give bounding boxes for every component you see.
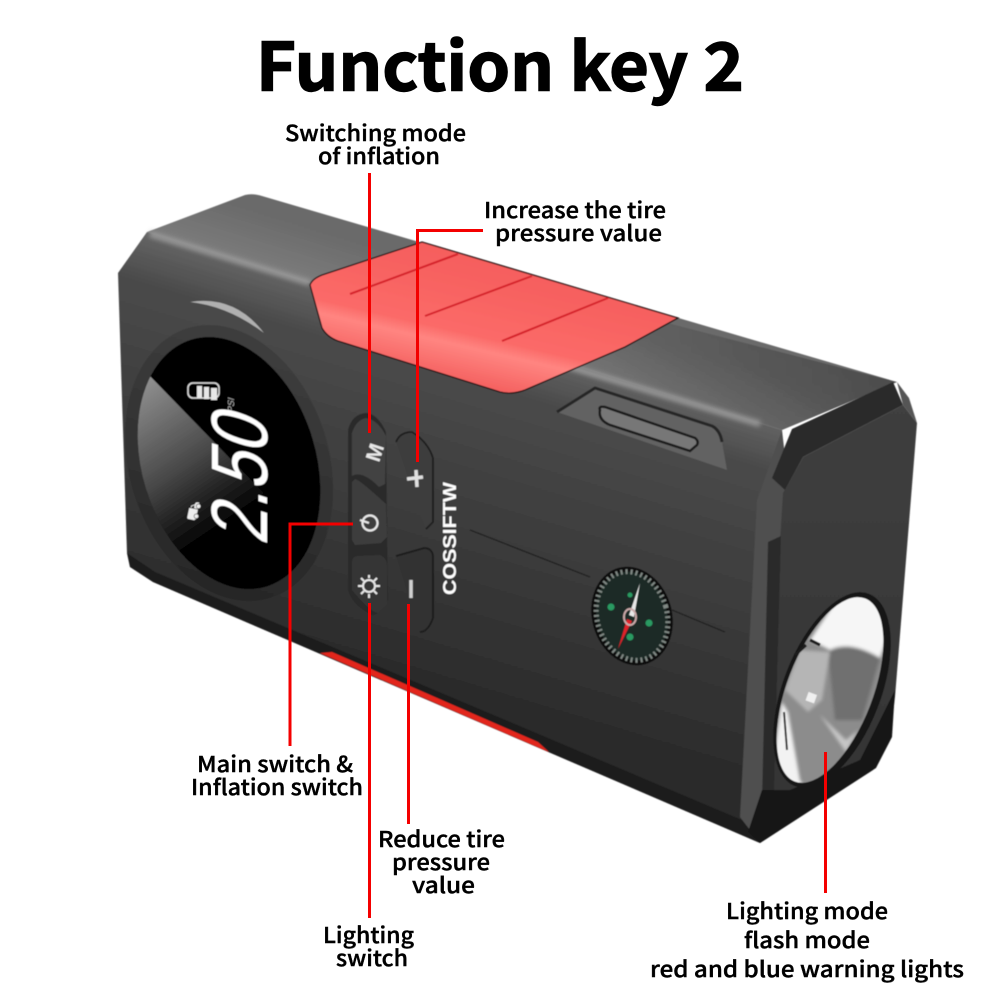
line: increase pressure xyxy=(418,230,483,462)
label: lighting mode, flash mode, warning lights: Lighting mode xyxy=(726,894,888,926)
label: lighting mode, flash mode, warning lights: flash mode xyxy=(744,923,870,955)
label: main switch and inflation switch: Inflation switch xyxy=(191,770,363,802)
minus sign xyxy=(409,580,413,598)
label: increase the tire pressure value: pressure value xyxy=(495,216,662,248)
device body side face xyxy=(118,232,785,843)
bezel groove xyxy=(762,536,781,800)
battery indicator xyxy=(188,383,219,400)
unit label: PSI xyxy=(226,396,236,414)
lens gray dome xyxy=(828,647,880,720)
pressure reading: 2.50 xyxy=(196,396,285,552)
label: reduce tire pressure value: Reduce tire xyxy=(378,822,505,854)
curved emboss near display xyxy=(190,301,264,333)
highlight along the top ridge xyxy=(150,234,760,424)
line: lighting mode xyxy=(824,752,827,893)
charging port recess xyxy=(557,388,727,470)
body seam lines xyxy=(470,530,725,632)
red lower strip xyxy=(320,652,549,752)
light button xyxy=(352,555,387,613)
label: lighting switch: Lighting xyxy=(323,918,414,950)
compass xyxy=(580,557,684,675)
front bezel xyxy=(740,430,790,843)
device: portable tire inflator xyxy=(92,194,917,843)
device top face xyxy=(147,194,897,430)
label: lighting mode, flash mode, warning lights: red and blue warning lights xyxy=(650,952,964,984)
label: reduce tire pressure value: pressure xyxy=(392,845,490,877)
plus sign xyxy=(407,470,423,487)
brand logo: COSSIFTW xyxy=(440,482,460,595)
lower front dark shell xyxy=(748,690,895,843)
label: increase the tire pressure value: Increase the tire xyxy=(484,193,666,225)
line: switching mode xyxy=(368,173,371,433)
plus button xyxy=(396,432,433,529)
line: main switch xyxy=(290,524,353,746)
minus button xyxy=(396,548,433,632)
bottom dark edge xyxy=(127,553,760,843)
label: switching mode of inflation: of inflation xyxy=(318,139,440,171)
lens white left edge xyxy=(776,702,804,784)
front face xyxy=(760,405,917,843)
flashlight lens xyxy=(774,592,891,787)
button group left xyxy=(348,413,389,615)
compass needle xyxy=(629,583,640,617)
red top panel xyxy=(310,242,678,393)
lens white upper crescent xyxy=(808,596,884,660)
label: increase the tire pressure value xyxy=(484,193,666,248)
label: reduce tire pressure value xyxy=(378,822,505,900)
sun icon xyxy=(358,575,380,598)
label: lighting switch xyxy=(323,918,414,973)
right edge highlight xyxy=(897,382,917,423)
power icon xyxy=(360,516,378,530)
title: Function key 2 xyxy=(256,14,744,110)
bezel upper chamfer xyxy=(772,382,903,490)
label: switching mode of inflation: Switching mode xyxy=(285,116,466,148)
lens reflector light area xyxy=(785,650,830,712)
line: lighting switch xyxy=(368,603,371,918)
label: switching mode of inflation xyxy=(285,116,466,171)
line: reduce pressure xyxy=(407,604,410,824)
power button xyxy=(352,479,387,545)
label: main switch and inflation switch: Main switch & xyxy=(197,747,353,779)
label: lighting switch: switch xyxy=(336,941,408,973)
M button xyxy=(352,418,386,487)
top face shading toward the right xyxy=(500,280,897,430)
car icon: ⛟ xyxy=(182,499,205,523)
display gloss reflection xyxy=(137,376,270,588)
callout lines xyxy=(290,173,826,918)
display xyxy=(126,326,332,590)
label: lighting mode, flash mode, warning lights xyxy=(650,894,964,984)
label: reduce tire pressure value: value xyxy=(412,868,475,900)
label: main switch and inflation switch xyxy=(191,747,363,802)
M label: M xyxy=(362,441,389,465)
